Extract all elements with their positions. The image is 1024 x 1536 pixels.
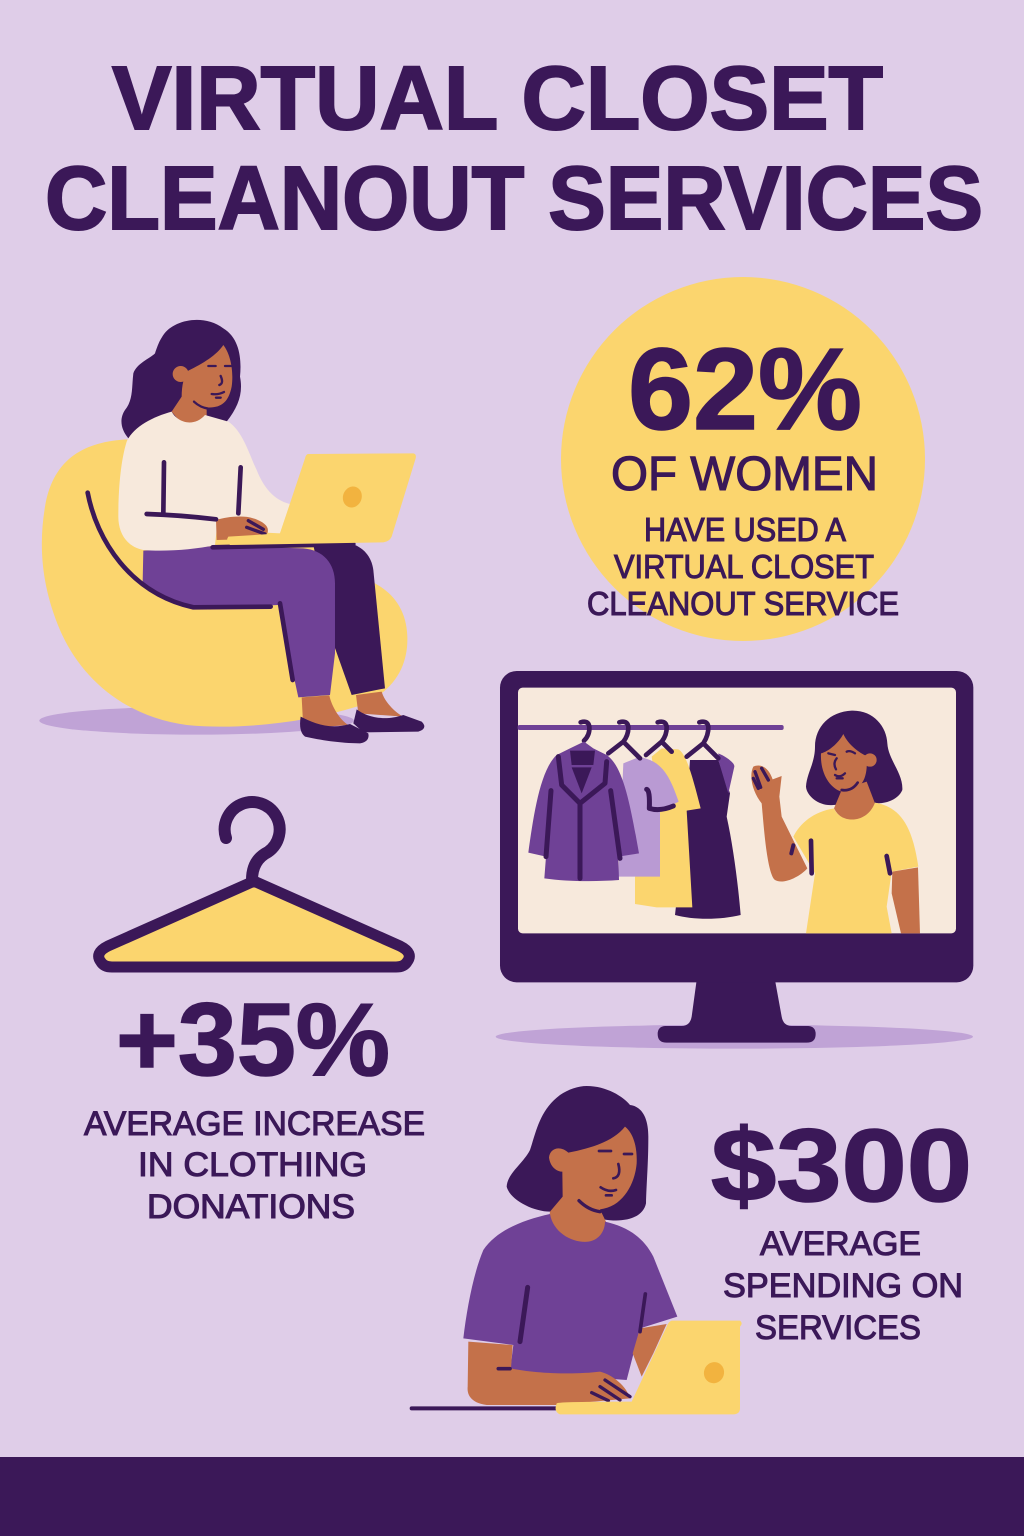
stat description: DONATIONS [147, 1188, 355, 1226]
person arms [751, 765, 920, 933]
monitor shadow [496, 1025, 973, 1049]
stat number: +35% [116, 982, 390, 1097]
yellow circle [561, 277, 925, 641]
face and neck [172, 345, 232, 424]
face and neck [549, 1127, 637, 1246]
person t-shirt [793, 803, 918, 933]
monitor body [500, 671, 973, 982]
t-shirt [463, 1214, 677, 1380]
hair [121, 320, 241, 440]
stat: $300 average spending [711, 1108, 972, 1347]
stat number: 62% [628, 324, 862, 454]
back leg [313, 543, 385, 695]
stat description [723, 1225, 963, 1347]
coat [528, 742, 639, 881]
laptop [227, 453, 416, 545]
monitor stand [658, 980, 816, 1043]
clothes rail [518, 725, 784, 730]
beanbag shadow [39, 707, 354, 735]
lower legs [302, 692, 403, 728]
stat description: VIRTUAL CLOSET [614, 548, 874, 585]
hair [507, 1086, 648, 1220]
stat description: SPENDING ON [723, 1267, 963, 1305]
arms [468, 1324, 667, 1405]
hand [216, 517, 268, 540]
icon: hanger [99, 802, 409, 967]
title: VIRTUAL CLOSET [112, 49, 883, 149]
stat description: IN CLOTHING [138, 1146, 367, 1184]
hangers [581, 722, 718, 758]
laptop [556, 1321, 742, 1414]
beanbag [42, 439, 407, 727]
callout: 62% of women [561, 277, 925, 641]
stat description: AVERAGE [760, 1225, 921, 1263]
stat description [84, 1105, 425, 1226]
stat description: AVERAGE INCREASE [84, 1105, 425, 1143]
person details [753, 751, 890, 873]
illustration: woman on beanbag with laptop [39, 320, 424, 743]
person skin [821, 734, 877, 820]
illustration: monitor with stylist video call [496, 671, 973, 1049]
shoes [300, 709, 424, 743]
coat details [546, 751, 673, 878]
title [45, 49, 983, 249]
screen [518, 688, 956, 933]
stat: +35% clothing donations [84, 982, 425, 1226]
stat description [587, 511, 899, 622]
title: CLEANOUT SERVICES [45, 149, 983, 249]
person hair [806, 711, 902, 805]
stat description: CLEANOUT SERVICE [587, 585, 899, 622]
stat description: SERVICES [755, 1309, 921, 1347]
stat number: $300 [711, 1108, 972, 1223]
outline strokes [412, 1151, 645, 1408]
dress [675, 753, 741, 919]
yellow shirt [635, 748, 701, 907]
facial features [194, 366, 232, 409]
stat label: OF WOMEN [611, 448, 878, 501]
stat description: HAVE USED A [644, 511, 846, 548]
footer band [0, 1457, 1024, 1536]
front leg [143, 546, 335, 697]
sweater [118, 412, 290, 551]
lilac shirt [618, 757, 679, 877]
outline strokes [88, 462, 353, 680]
illustration: woman at laptop [412, 1086, 742, 1414]
